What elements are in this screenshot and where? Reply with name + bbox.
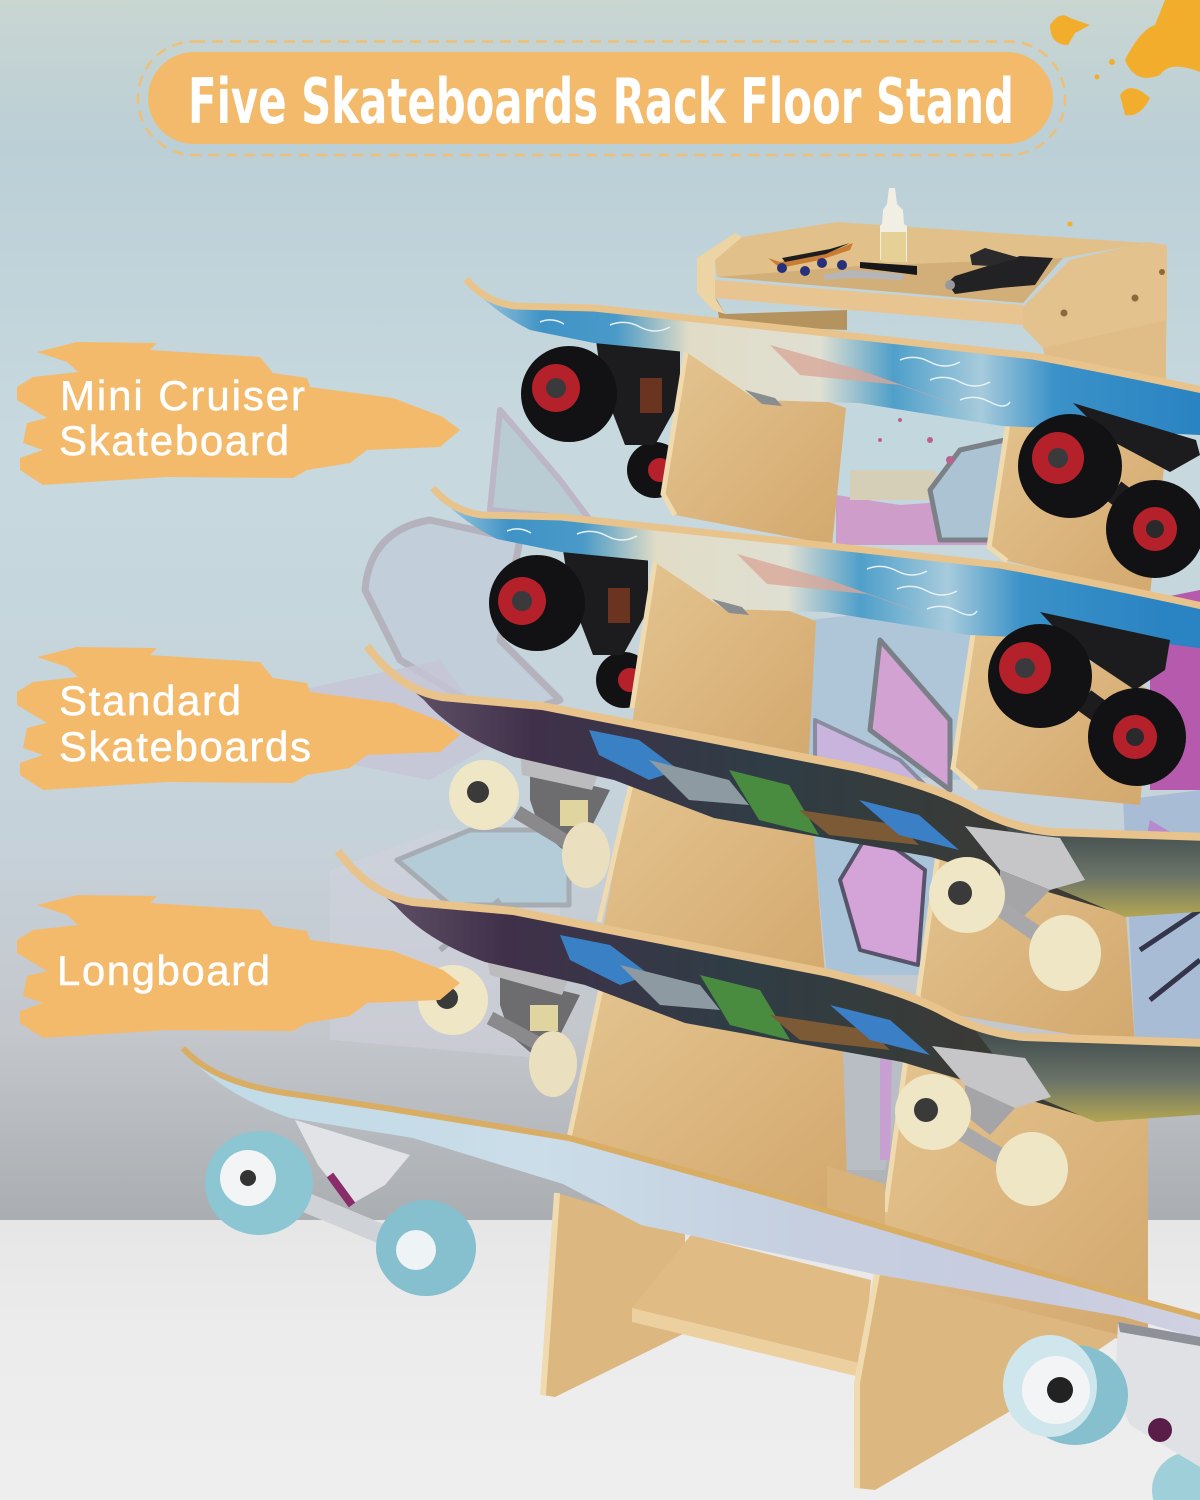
black trucks and wheels on mini cruisers [489, 346, 1200, 786]
paint splashes [1050, 0, 1200, 226]
title banner [138, 42, 1065, 155]
label: longboard [17, 895, 460, 1038]
left foot [543, 1193, 685, 1397]
skateboard 4: standard lower [338, 851, 1200, 1122]
right back post [1023, 242, 1167, 470]
rack base with feet and step [543, 1166, 1120, 1490]
screw holes [1060, 269, 1165, 316]
icon: fingerboard and tools [768, 243, 1053, 294]
shelf back wall [715, 222, 1147, 302]
label: longboard: Longboard [57, 947, 270, 994]
shelf floor [717, 258, 1063, 303]
skateboard 3: standard upper [367, 646, 1200, 917]
skateboard 5: longboard [183, 1048, 1200, 1350]
right foot [857, 1274, 1120, 1490]
skateboard 1: mini cruiser top [466, 279, 1200, 440]
rear wheels and trucks behind the rack [486, 340, 683, 1097]
background graffiti mural [300, 396, 1200, 1170]
icon: oil bottle [880, 188, 907, 262]
label: standard skateboards: Standard [59, 677, 241, 724]
rack right upright panels [885, 396, 1165, 1345]
shelf right end [1023, 242, 1167, 348]
label: standard skateboards [17, 647, 460, 790]
shelf support [716, 298, 847, 330]
rack back post and shelf [697, 188, 1167, 470]
label: mini cruiser skateboard [17, 342, 460, 485]
rack left upright panels [569, 352, 848, 1215]
label: mini cruiser skateboard: Skateboard [59, 417, 289, 464]
shelf left end [697, 233, 742, 314]
label: standard skateboards: Skateboards [59, 723, 311, 770]
longboard right truck and wheels [1003, 1322, 1200, 1500]
floor [0, 1220, 1200, 1500]
cream trucks and wheels on standard skateboards [418, 760, 1101, 1206]
skateboard 2: mini cruiser lower [433, 488, 1200, 649]
label: mini cruiser skateboard: Mini Cruiser [60, 372, 305, 419]
back strut [827, 1166, 885, 1235]
step front [632, 1308, 863, 1377]
shelf front rail [715, 280, 1023, 325]
step top [632, 1235, 871, 1364]
longboard left truck and wheels [205, 1120, 476, 1296]
